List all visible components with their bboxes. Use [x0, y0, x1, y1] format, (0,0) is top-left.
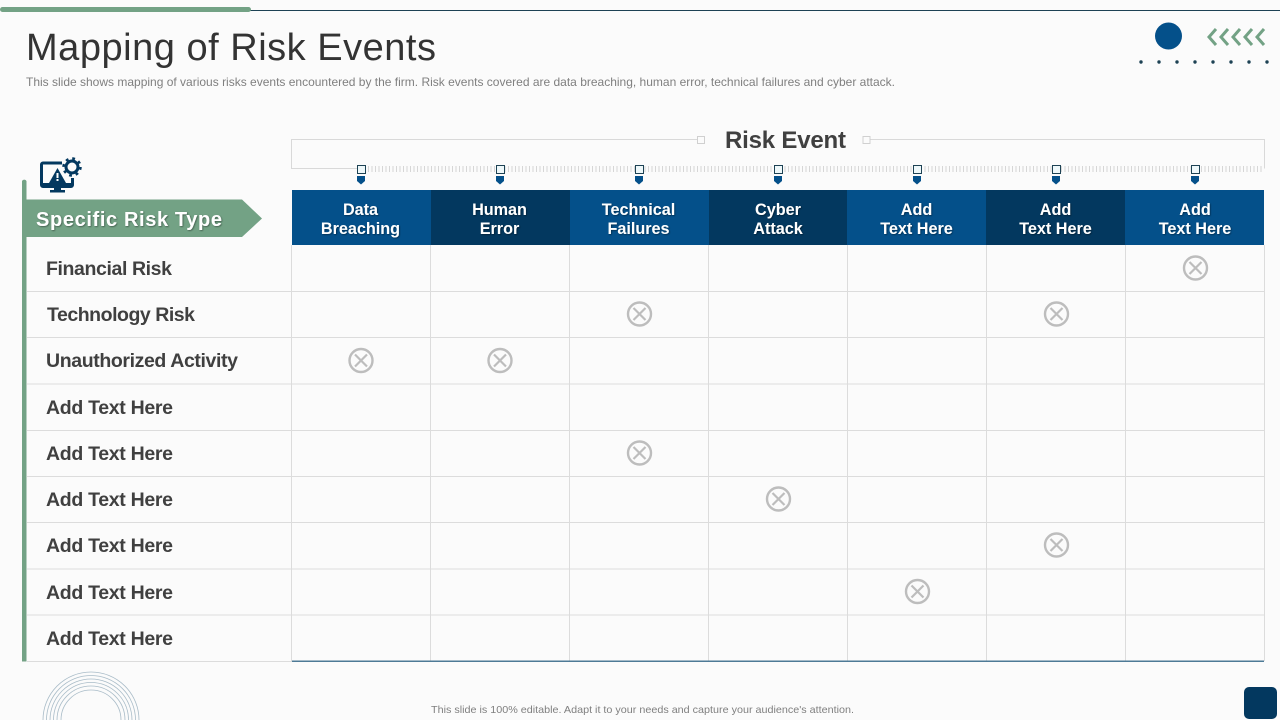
table bottom rule [292, 660, 1264, 662]
header: Add Text Here 2 [986, 190, 1125, 245]
header: Add Text Here 1: Add [901, 201, 932, 219]
mark: row 8 / column 5 [906, 580, 929, 603]
row labels: Add Text Here [46, 489, 173, 511]
header: Add Text Here 3 [1125, 190, 1264, 245]
header: Technical Failures: Failures [607, 220, 670, 238]
header: Human Error: Human [472, 201, 527, 219]
row labels: Add Text Here [46, 397, 173, 419]
column headers [292, 190, 1264, 245]
mark: row 6 / Cyber Attack [767, 488, 790, 510]
header: Human Error [431, 190, 570, 245]
decoration: dots [1139, 60, 1269, 64]
mark: Unauthorized Activity / Data Breaching [350, 349, 372, 372]
mark: Unauthorized Activity / Human Error [488, 349, 512, 372]
mark: row 5 / Technical Failures [628, 442, 651, 464]
panel: risk event header frame [292, 136, 1264, 168]
header: Human Error: Error [480, 220, 520, 238]
row labels: Add Text Here [46, 582, 173, 604]
header: Technical Failures [570, 190, 709, 245]
column markers [357, 166, 1200, 184]
header: Cyber Attack: Cyber [755, 201, 802, 219]
top rule [0, 7, 1280, 12]
header: Data Breaching: Data [343, 201, 379, 219]
header: Cyber Attack [709, 190, 847, 245]
banner: specific risk type: Specific Risk Type [36, 209, 222, 231]
title: Mapping of Risk Events [26, 27, 436, 69]
cross marks [350, 256, 1207, 603]
mark: Technology Risk / Technical Failures [628, 302, 651, 326]
mark: Technology Risk / column 6 [1045, 302, 1068, 326]
header: Add Text Here 3: Text Here [1159, 220, 1231, 238]
row labels: Unauthorized Activity [46, 350, 238, 372]
header: Technical Failures: Technical [602, 201, 675, 219]
subtitle: This slide shows mapping of various risks events encountered by the firm. Risk events covered are data breaching, human error, technical failures and cyber attack. [26, 75, 895, 89]
footer note: This slide is 100% editable. Adapt it to your needs and capture your audience's attention. [431, 704, 854, 716]
footer button [1244, 687, 1277, 719]
banner: specific risk type [26, 200, 262, 237]
header: Add Text Here 1: Text Here [880, 220, 953, 238]
row labels: Add Text Here [46, 535, 173, 557]
header: Add Text Here 2: Text Here [1019, 220, 1092, 238]
dotted connector [361, 166, 1264, 172]
row labels [46, 258, 238, 650]
icon: monitor with warning and gear [41, 158, 80, 192]
header: Data Breaching [292, 190, 431, 245]
decoration: circle [1155, 22, 1182, 50]
row labels: Financial Risk [46, 258, 172, 280]
mark: row 7 / column 6 [1045, 534, 1068, 556]
decoration: chevrons [1209, 29, 1264, 45]
row labels: Add Text Here [46, 628, 173, 650]
row labels: Technology Risk [47, 304, 195, 326]
mark: Financial Risk / column 7 [1184, 256, 1207, 280]
header: Add Text Here 1 [847, 190, 986, 245]
header: Data Breaching: Breaching [321, 220, 400, 238]
row labels: Add Text Here [46, 443, 173, 465]
heading: risk event: Risk Event [725, 127, 846, 154]
table grid [27, 245, 1264, 662]
header: Add Text Here 3: Add [1179, 201, 1211, 219]
header: Add Text Here 2: Add [1040, 201, 1071, 219]
header: Cyber Attack: Attack [753, 220, 804, 238]
left accent bar [22, 180, 26, 662]
decoration: concentric arcs [43, 672, 139, 720]
